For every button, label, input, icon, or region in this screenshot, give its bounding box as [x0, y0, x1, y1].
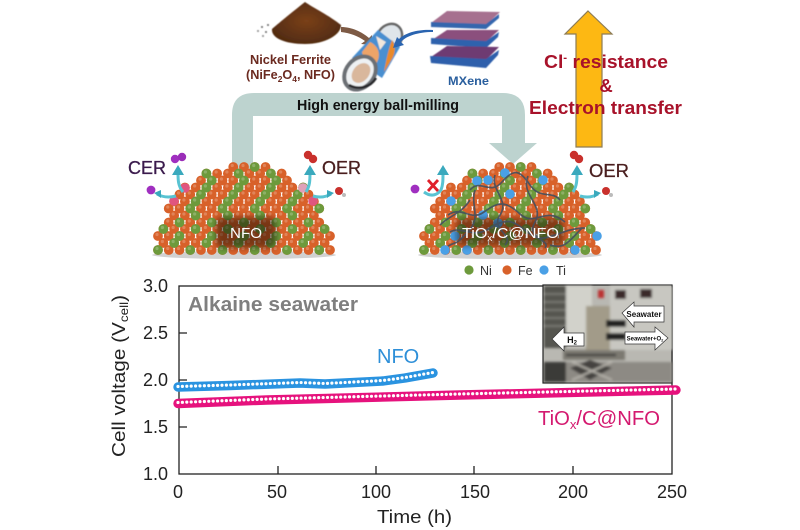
y axis title: cell	[117, 302, 131, 322]
y axis labels: 3.0	[143, 276, 168, 296]
label: NFO series: NFO	[377, 346, 419, 368]
label: nickel ferrite: O	[282, 67, 292, 82]
x axis title: Time (h)	[377, 506, 452, 527]
y axis title: Cell voltage (V	[108, 337, 129, 457]
panel: NFO atom dome	[152, 166, 336, 259]
y axis labels: 1.5	[143, 417, 168, 437]
callout: Cl- resistance and electron transfer: Electron transfer	[529, 97, 682, 118]
arrow: powder to jar	[341, 27, 372, 45]
callout: Cl- resistance and electron transfer: &	[599, 75, 613, 96]
arrow: Seawater+O2 outlet: Seawater+O	[627, 336, 661, 342]
label: nickel ferrite: 2	[278, 74, 283, 84]
x axis labels: 250	[657, 482, 687, 502]
callout: Cl- resistance and electron transfer: resistance	[567, 51, 668, 72]
arrow: high energy ball-milling path: High energy ball-milling	[297, 98, 459, 114]
label: OER with molecules and arrows (NFO)	[304, 151, 361, 198]
x axis labels: 50	[267, 482, 287, 502]
arrow: H2 outlet: H	[567, 335, 574, 345]
panel: TiOx/C@NFO atom dome: /C@NFO	[492, 225, 559, 242]
y axis labels	[143, 276, 168, 484]
label: OER with molecules and arrows (TiOx/C@NFO): OER	[589, 160, 629, 181]
label: nickel ferrite: Nickel Ferrite	[250, 52, 331, 67]
inset photo: electrolyser setup	[543, 285, 672, 383]
arrow: H2 outlet: 2	[574, 340, 578, 346]
label: OER with molecules and arrows (TiOx/C@NFO)	[570, 151, 629, 198]
x axis labels	[173, 482, 687, 502]
callout: Cl- resistance and electron transfer: Cl	[544, 51, 562, 72]
label: nickel ferrite	[246, 52, 335, 84]
arrow: Seawater inlet: Seawater	[626, 310, 662, 319]
arrow: yellow performance increase	[565, 11, 612, 147]
carbon network strands	[440, 173, 585, 248]
chart: cell voltage versus time	[108, 276, 687, 527]
label: OER with molecules and arrows (NFO): OER	[322, 157, 361, 178]
y axis title: )	[108, 295, 129, 302]
arrow: high energy ball-milling path	[232, 93, 537, 172]
panel: TiOx/C@NFO atom dome: TiO	[462, 225, 486, 242]
label: nickel ferrite: 4	[292, 74, 297, 84]
icon: nickel ferrite powder	[257, 2, 341, 44]
x axis labels: 200	[558, 482, 588, 502]
series: NFO	[178, 372, 433, 387]
panel: NFO atom dome: NFO	[230, 225, 262, 242]
arrow: Seawater+O2 outlet: 2	[661, 338, 664, 342]
label: CER with molecules and arrows: CER	[128, 157, 166, 178]
label: TiOx/C@NFO series: /C@NFO	[576, 408, 660, 430]
x axis labels: 150	[460, 482, 490, 502]
icon: ball-milling jar	[338, 19, 407, 96]
plot frame with ticks	[179, 286, 672, 474]
legend: atom types: Fe	[518, 264, 533, 278]
arrow: Seawater+O2 outlet	[625, 327, 668, 350]
y axis labels: 2.0	[143, 370, 168, 390]
panel: TiOx/C@NFO atom dome: x	[487, 233, 493, 243]
label: MXene: MXene	[448, 74, 489, 88]
legend: atom types: Ni	[480, 264, 492, 278]
series: TiOx/C@NFO	[178, 389, 676, 404]
label: TiOx/C@NFO series: x	[570, 417, 577, 432]
arrow: MXene to jar	[393, 30, 433, 48]
panel: TiOx/C@NFO atom dome	[418, 166, 602, 259]
y axis labels: 2.5	[143, 323, 168, 343]
x axis labels: 0	[173, 482, 183, 502]
callout: Cl- resistance and electron transfer: -	[563, 52, 567, 64]
icon: blocked chlorine evolution	[411, 165, 449, 195]
label: CER with molecules and arrows	[128, 153, 186, 198]
label: TiOx/C@NFO series: TiO	[538, 408, 569, 430]
callout: Cl- resistance and electron transfer	[529, 51, 682, 118]
chart title: Alkaine seawater	[188, 294, 358, 316]
arrow: H2 outlet	[552, 327, 584, 351]
label: nickel ferrite: (NiFe	[246, 67, 278, 82]
label: nickel ferrite: , NFO)	[297, 67, 335, 82]
icon: MXene layers	[430, 11, 500, 68]
y axis labels: 1.0	[143, 464, 168, 484]
legend: atom types: Ti	[556, 264, 566, 278]
legend: atom types	[464, 264, 566, 278]
x axis labels: 100	[361, 482, 391, 502]
